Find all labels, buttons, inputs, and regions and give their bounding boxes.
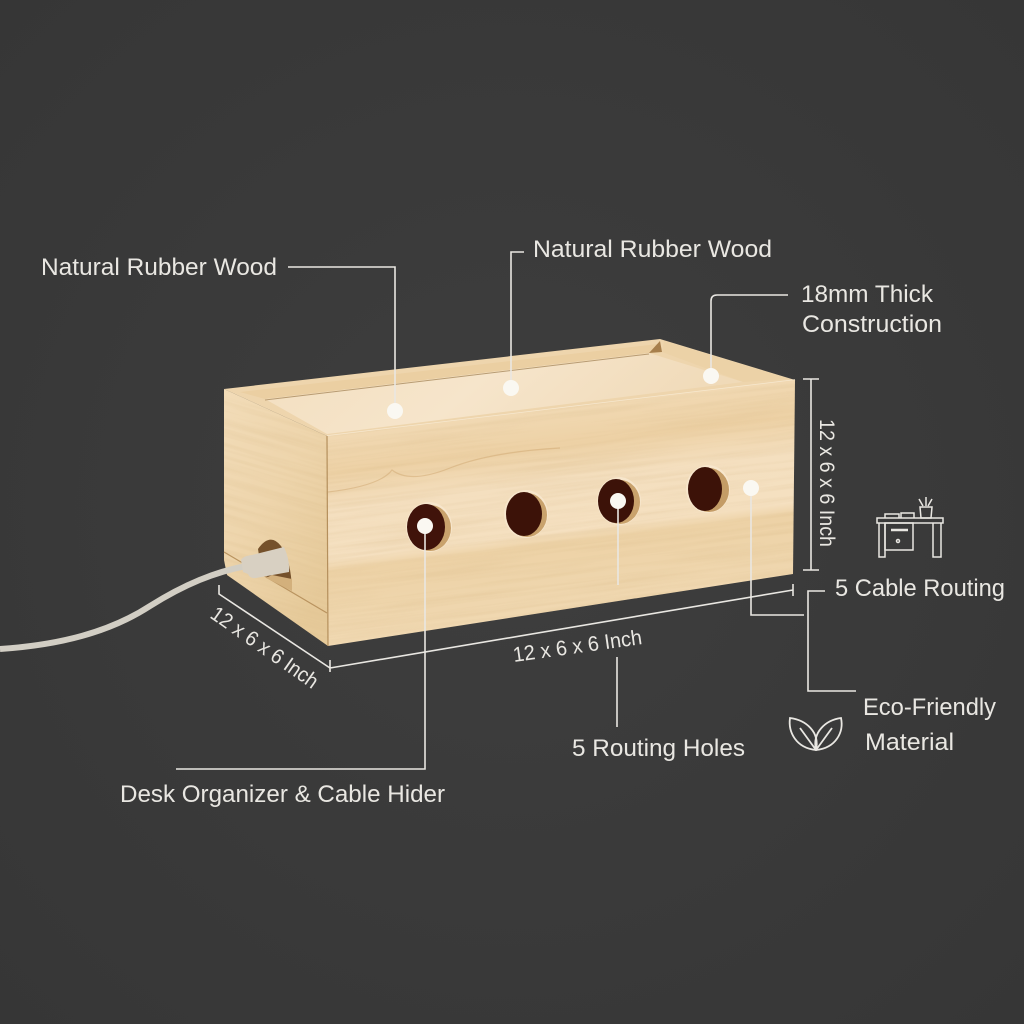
callout dots — [387, 368, 759, 534]
label: desk organizer: Desk Organizer & Cable Hider — [120, 781, 445, 808]
label: natural rubber wood left: Natural Rubber Wood — [41, 254, 277, 281]
dimension: depth — [219, 585, 330, 668]
label: natural rubber wood centre: Natural Rubber Wood — [533, 236, 772, 263]
product: wooden cable box — [0, 339, 796, 652]
callout line: centre rubber wood — [511, 252, 524, 388]
label: 18mm thick construction: Construction — [802, 311, 942, 338]
dimension: length — [330, 584, 793, 672]
label: 5 routing holes: 5 Routing Holes — [572, 735, 745, 762]
callout line: thick construction — [711, 295, 788, 376]
callout line: side dot — [751, 488, 804, 615]
callout line: left rubber wood — [288, 267, 395, 410]
routing hole 4 — [686, 465, 730, 513]
label: 18mm thick construction — [801, 281, 942, 338]
box top with lid — [224, 339, 795, 436]
label: eco-friendly material — [863, 694, 996, 756]
box left face — [224, 389, 328, 646]
callout lines and dots — [176, 252, 856, 769]
dimension lines — [219, 379, 819, 672]
routing hole 2 — [504, 490, 548, 538]
label: eco-friendly material: Material — [865, 729, 954, 756]
icon: leaves — [790, 718, 842, 750]
callout line: routing holes label — [616, 657, 618, 727]
dimension: height — [803, 379, 819, 570]
routing hole 1 — [406, 502, 452, 552]
routing hole 3 — [597, 477, 641, 525]
label: side dimension: 12 x 6 x 6 Inch — [206, 602, 323, 693]
infographic canvas — [0, 240, 1004, 807]
power cord and plug — [0, 547, 289, 649]
label: 5 cable routing: 5 Cable Routing — [835, 575, 1005, 602]
icon: desk — [877, 497, 943, 557]
label: front dimension: 12 x 6 x 6 Inch — [511, 626, 643, 667]
callout line: hole 3 — [617, 501, 619, 585]
box front face — [326, 380, 795, 646]
callout line: cable routing and eco — [808, 591, 856, 691]
label: height dimension: 12 x 6 x 6 Inch — [815, 419, 838, 547]
label: 18mm thick construction: 18mm Thick — [801, 281, 934, 308]
label: eco-friendly material: Eco-Friendly — [863, 694, 996, 721]
callout line: desk organizer — [176, 526, 425, 769]
